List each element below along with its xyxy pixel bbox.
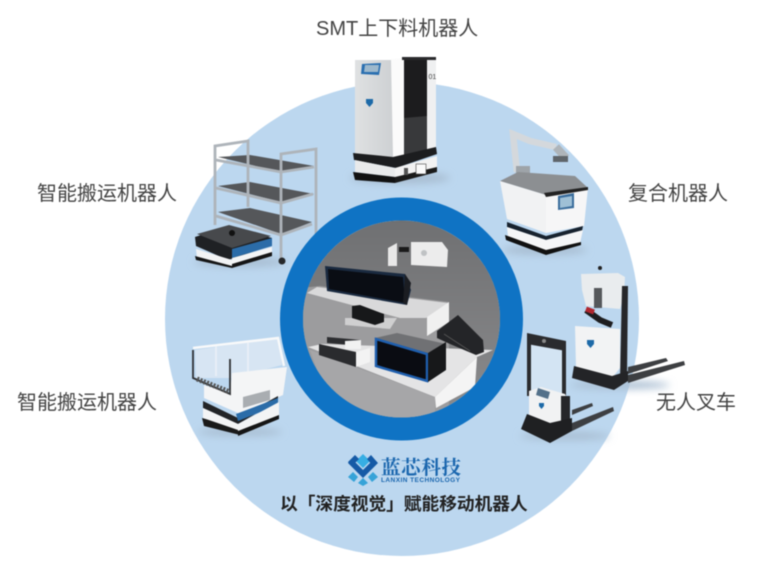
icon: logo diamonds <box>348 454 378 486</box>
icon: SMT loading robot <box>350 57 450 184</box>
icon: small dark camera <box>352 305 384 325</box>
tagline: 以「深度视觉」赋能移动机器人 <box>280 494 528 514</box>
icon: forklift large <box>570 266 685 390</box>
icon: angled dark camera <box>437 315 484 355</box>
logo: LanXin Technology <box>348 454 461 486</box>
logo wordmark: 蓝芯科技 <box>381 456 461 479</box>
center ring <box>292 209 512 429</box>
mark: 01: 01 <box>428 74 436 81</box>
icon: white bracket camera <box>388 242 448 267</box>
title label: SMT robot: SMT上下料机器人 <box>316 17 478 40</box>
icon: main blue-framed camera <box>375 333 446 382</box>
label: forklift: 无人叉车 <box>656 391 736 414</box>
icon: long stereo camera <box>325 266 411 305</box>
icon: flat camera modules <box>319 337 370 367</box>
label: composite robot: 复合机器人 <box>628 182 728 205</box>
center photo: depth cameras <box>300 218 504 422</box>
icon: roller-top handling robot <box>193 338 287 436</box>
icon: composite robot with arm <box>500 134 588 255</box>
label: handling robot lower: 智能搬运机器人 <box>17 391 157 414</box>
label: handling robot upper: 智能搬运机器人 <box>37 182 177 205</box>
logo subtitle: LANXIN TECHNOLOGY <box>381 477 461 484</box>
icon: forklift small <box>520 333 614 443</box>
background disc <box>165 82 639 556</box>
icon: shelf cart robot <box>194 141 316 268</box>
